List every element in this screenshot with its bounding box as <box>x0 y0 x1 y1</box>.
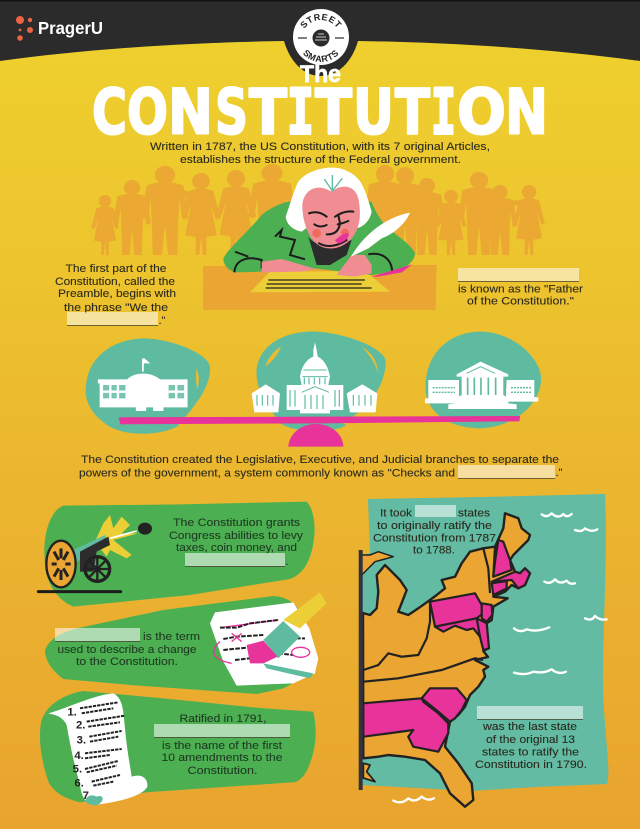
teal blobs <box>86 332 541 434</box>
checks and balances text <box>79 454 563 480</box>
checks and balances text: ." <box>556 467 563 479</box>
hands <box>262 255 372 277</box>
header band <box>0 0 640 76</box>
icon: US Capitol <box>252 342 378 413</box>
Street Smarts badge: STREET <box>300 14 342 28</box>
father of the Constitution text <box>458 268 583 308</box>
intro text <box>150 141 490 166</box>
icon: White House <box>98 358 188 411</box>
amendment text <box>55 628 200 668</box>
icon: cannon <box>38 515 152 592</box>
icon: amended document <box>210 592 327 686</box>
taxes text: Congress abilities to levy <box>169 530 304 542</box>
father of the Constitution text: of the Constitution." <box>467 296 574 308</box>
bill of rights text: is the name of the first <box>162 740 282 752</box>
title: T <box>315 76 352 148</box>
face <box>302 187 360 248</box>
map of the original states <box>361 494 608 807</box>
desk <box>203 265 437 310</box>
collar and sleeve marks <box>234 230 392 272</box>
title: N <box>168 76 213 148</box>
ratify text: to 1788. <box>413 544 455 556</box>
title: U <box>353 76 394 148</box>
Street Smarts badge <box>293 9 349 65</box>
icon: scroll: 2. <box>76 719 85 731</box>
bill of rights text: 10 amendments to the <box>162 752 282 764</box>
preamble text <box>55 263 176 327</box>
preamble text: Preamble, begins with <box>58 288 176 300</box>
southern inlet land <box>363 763 375 782</box>
PragerU logo <box>16 16 103 41</box>
quill <box>351 213 410 257</box>
green coat <box>223 202 415 275</box>
preamble text: The first part of the <box>66 263 166 275</box>
icon: scroll <box>48 693 147 806</box>
title: T <box>249 76 287 148</box>
last state text <box>475 706 587 771</box>
waves <box>393 513 607 802</box>
ratify text: It took <box>380 508 413 520</box>
ratify text: to originally ratify the <box>377 520 492 532</box>
panel: amendment <box>45 596 315 694</box>
ratifying states <box>363 540 530 752</box>
title: The <box>300 61 341 88</box>
PragerU logo: PragerU <box>38 18 103 38</box>
panel: bill of rights <box>40 691 316 802</box>
Street Smarts badge: SMARTS <box>304 50 338 62</box>
title: I <box>431 76 456 148</box>
ratify text: Constitution from 1787 <box>373 532 496 544</box>
people silhouettes <box>91 164 545 255</box>
bill of rights text: Constitution. <box>188 765 258 777</box>
last state text: Constitution in 1790. <box>475 759 587 771</box>
preamble text: ." <box>158 315 166 327</box>
checks and balances text: The Constitution created the Legislative, Executive, and Judicial branches to separate the <box>81 454 559 466</box>
preamble text: Constitution, called the <box>55 276 175 288</box>
taxes text: taxes, coin money, and <box>176 542 297 554</box>
icon: scroll: 6. <box>74 778 84 790</box>
neck <box>308 237 352 265</box>
title: C <box>92 76 127 148</box>
last state text: states to ratify the <box>482 746 579 758</box>
title: O <box>457 76 506 148</box>
facial features <box>309 175 353 246</box>
paper <box>250 271 390 292</box>
title: O <box>127 76 168 148</box>
state borders <box>363 547 495 682</box>
beam and fulcrum <box>119 416 520 447</box>
title: I <box>287 76 314 148</box>
border line <box>359 550 363 790</box>
bill of rights text <box>154 713 290 777</box>
intro text: Written in 1787, the US Constitution, with its 7 original Articles, <box>150 141 490 153</box>
icon: scroll: 5. <box>73 764 82 776</box>
title <box>92 61 548 148</box>
title: T <box>395 76 430 148</box>
ratify text <box>373 505 496 556</box>
icon: scroll: 3. <box>77 734 86 746</box>
land <box>363 513 530 807</box>
northern peninsula <box>362 552 393 575</box>
father of the Constitution text: is known as the "Father <box>458 284 583 296</box>
icon: scroll: 1. <box>67 707 77 719</box>
icon: scroll: 4. <box>74 750 84 762</box>
hair <box>286 168 372 232</box>
amendment text: is the term <box>143 631 200 643</box>
taxes text <box>169 517 304 568</box>
writer at desk illustration <box>203 168 437 310</box>
checks and balances text: powers of the government, a system commonly known as "Checks and <box>79 468 455 480</box>
icon: Supreme Court <box>425 362 538 409</box>
title: S <box>215 76 248 148</box>
bill of rights text: Ratified in 1791, <box>180 713 266 725</box>
left panels <box>38 502 327 806</box>
last state text: was the last state <box>482 721 577 733</box>
ratify text: states <box>458 508 491 520</box>
ocean <box>362 494 608 791</box>
title: N <box>505 76 548 148</box>
amendment text: to the Constitution. <box>76 656 178 668</box>
icon: scroll: 7. <box>83 790 92 802</box>
amendment text: used to describe a change <box>58 644 196 656</box>
panel: taxes <box>44 502 315 607</box>
last state text: of the original 13 <box>486 734 575 746</box>
preamble text: the phrase "We the <box>64 302 168 314</box>
taxes text: The Constitution grants <box>173 517 301 529</box>
taxes text: . <box>286 556 289 568</box>
balance of powers illustration <box>86 332 541 447</box>
intro text: establishes the structure of the Federal government. <box>180 154 461 166</box>
